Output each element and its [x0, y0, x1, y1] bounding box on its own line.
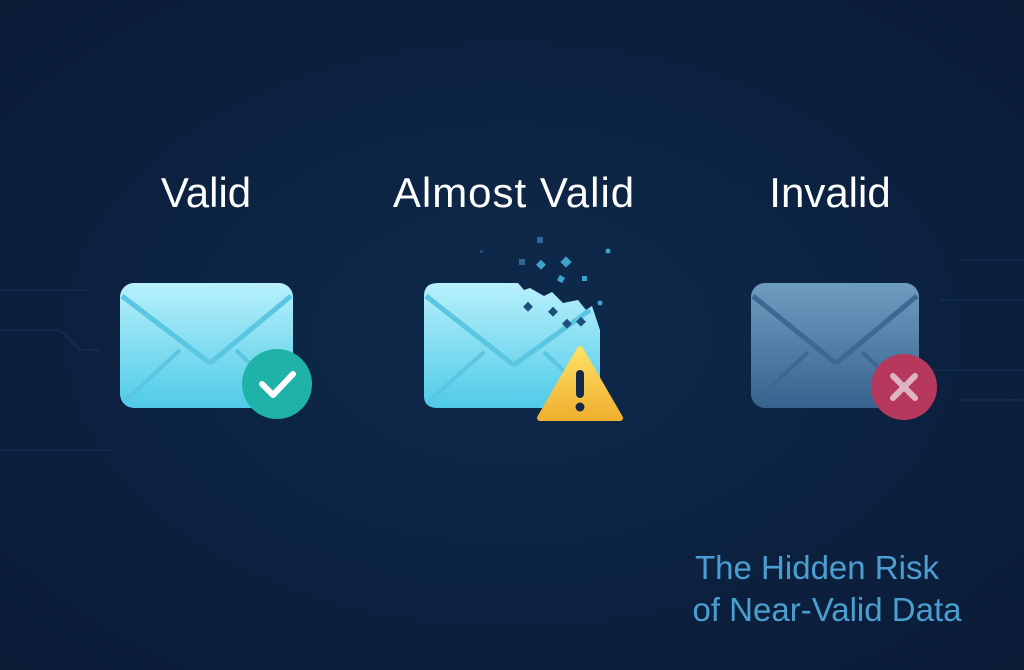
icon: almost valid envelope: [424, 237, 620, 418]
caption: The Hidden Risk: [695, 549, 939, 586]
icon: x badge: [871, 354, 937, 420]
icon: warning badge: [540, 349, 620, 418]
caption: of Near-Valid Data: [692, 591, 962, 628]
title: Valid: Valid: [161, 169, 251, 216]
icon: valid envelope: [120, 283, 312, 419]
icon: invalid envelope: [751, 283, 937, 420]
title: Almost Valid: Almost Valid: [393, 169, 635, 216]
title: Invalid: Invalid: [769, 169, 891, 216]
icon: check badge: [242, 349, 312, 419]
caption: [692, 549, 962, 628]
